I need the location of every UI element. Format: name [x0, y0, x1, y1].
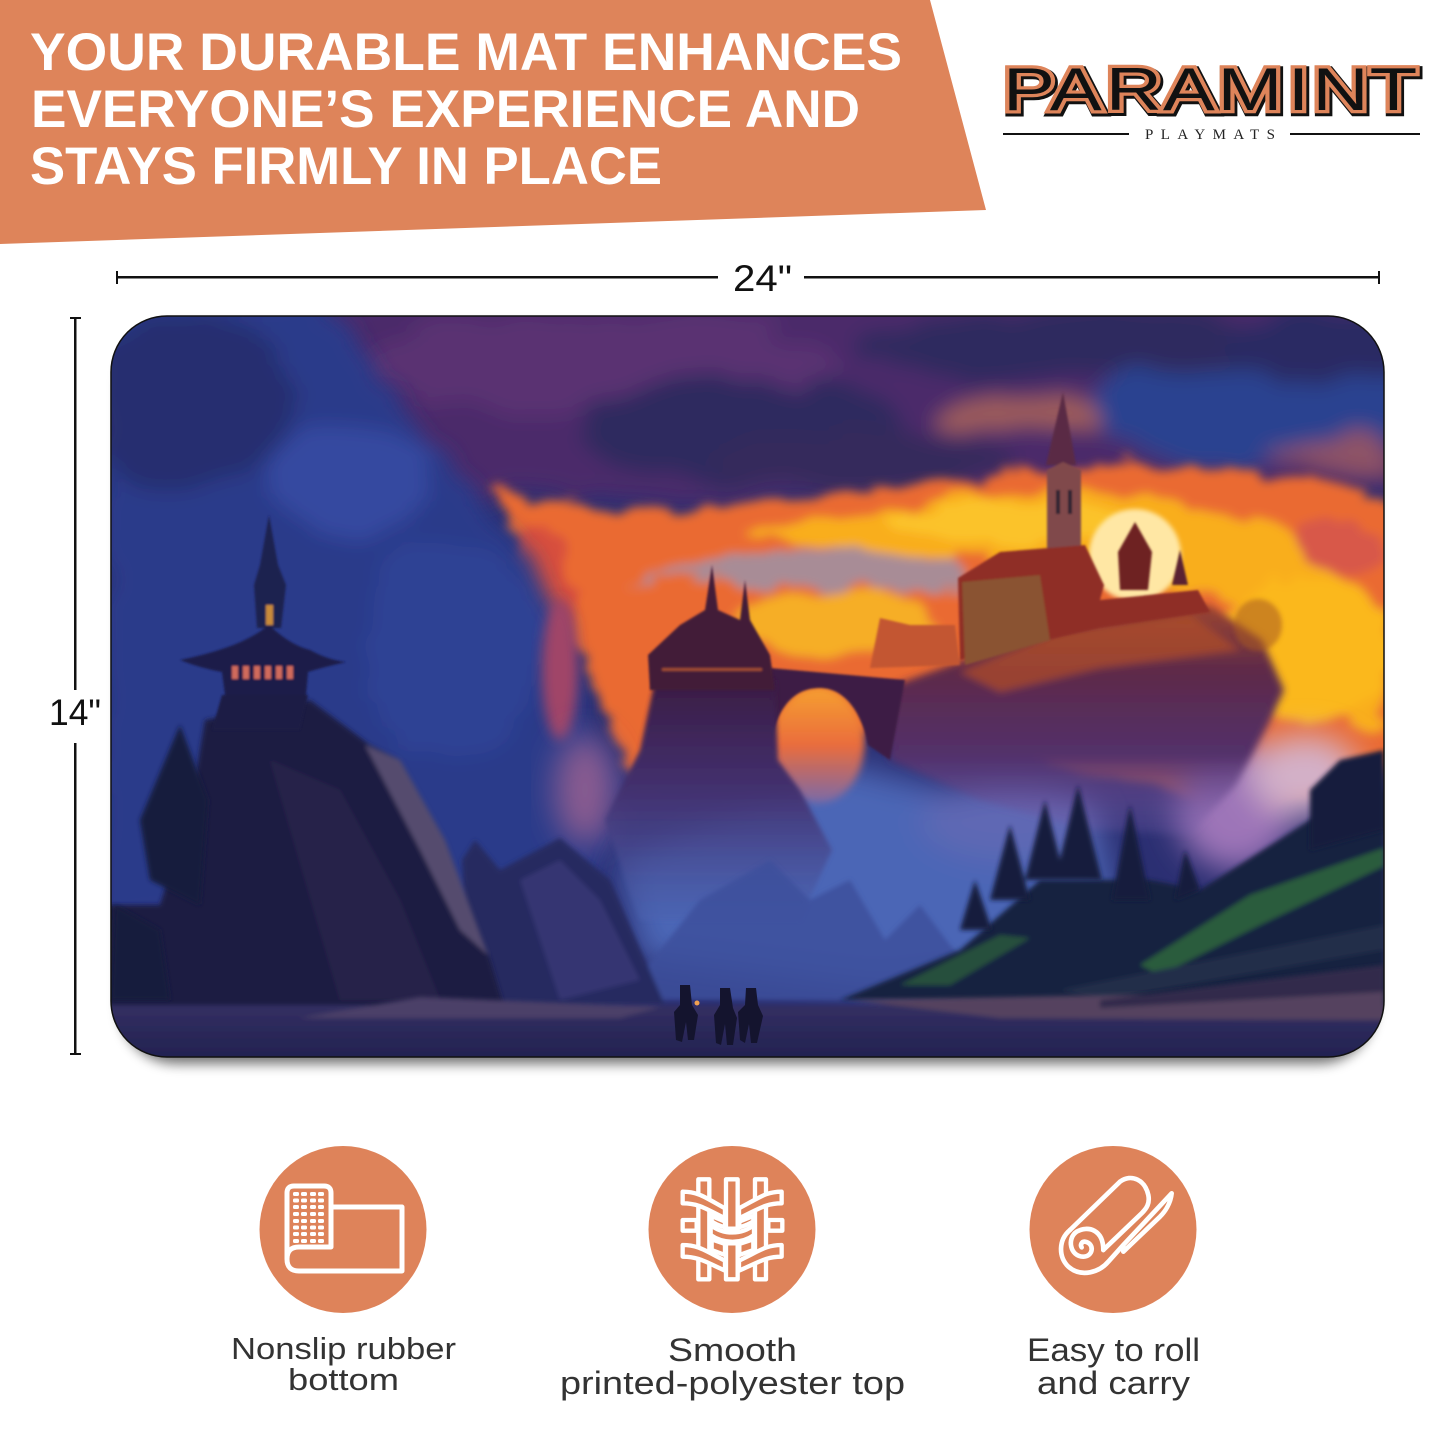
label: smooth printed-polyester top: printed-polyester top	[560, 1365, 905, 1401]
icon: rolled mat	[1030, 1146, 1196, 1313]
logo: Paramint Playmats: PARAMINT	[1003, 56, 1417, 123]
right castle	[958, 392, 1210, 665]
mat shadow	[120, 326, 1375, 1064]
left castle rock	[604, 688, 832, 902]
red edge of cliff	[542, 600, 578, 740]
feature: easy to roll and carry	[1027, 1146, 1200, 1401]
ground	[112, 964, 1384, 1056]
arch glow	[772, 687, 864, 803]
label: smooth printed-polyester top: Smooth	[668, 1332, 797, 1368]
logo: Paramint Playmats: PARAMINT	[1003, 56, 1417, 123]
feature: nonslip rubber bottom	[231, 1146, 456, 1397]
icon: woven fabric	[648, 1146, 816, 1313]
logo: Paramint Playmats: PLAYMATS	[1145, 127, 1275, 143]
label: nonslip rubber bottom: bottom	[288, 1362, 399, 1397]
distant tree clump	[1234, 599, 1282, 651]
playmat artwork	[90, 290, 1430, 1065]
pagoda tower	[180, 515, 346, 730]
label: nonslip rubber bottom	[231, 1331, 456, 1397]
feature: smooth polyester top	[560, 1146, 905, 1401]
label: smooth printed-polyester top	[560, 1332, 905, 1401]
label: easy to roll and carry: Easy to roll	[1027, 1332, 1200, 1368]
blue mid mountains	[460, 837, 955, 1004]
valley mist	[620, 735, 1360, 990]
left castle	[648, 565, 775, 690]
headline text: YOUR DURABLE MAT ENHANCES	[30, 23, 902, 82]
label: nonslip rubber bottom: Nonslip rubber	[231, 1331, 456, 1366]
headline text	[30, 23, 902, 196]
left trees	[111, 725, 208, 1000]
three riders	[674, 985, 763, 1045]
icon: rubber mat	[260, 1146, 426, 1313]
label: easy to roll and carry: and carry	[1037, 1365, 1190, 1401]
mat border	[111, 316, 1384, 1057]
banner: headline	[0, 0, 986, 244]
label: easy to roll and carry	[1027, 1332, 1200, 1401]
floating rock	[880, 605, 1284, 835]
sun	[1089, 509, 1181, 601]
dimension: height 14 inches: 14"	[49, 692, 101, 733]
sky and clouds	[328, 316, 1384, 509]
headline text: STAYS FIRMLY IN PLACE	[30, 137, 662, 196]
right trees	[960, 750, 1384, 930]
pink mist at cliff foot	[555, 735, 615, 845]
headline text: EVERYONE’S EXPERIENCE AND	[31, 80, 860, 139]
right hillside	[840, 790, 1384, 1010]
left cliff	[100, 700, 505, 1010]
sunset glow	[495, 462, 1400, 810]
logo: Paramint Playmats: PARAMINT	[1005, 58, 1419, 125]
left blue mountain	[90, 300, 615, 920]
small houses	[870, 618, 960, 668]
stone bridge and arch	[770, 668, 905, 760]
dimension: width 24 inches: 24"	[733, 258, 792, 299]
